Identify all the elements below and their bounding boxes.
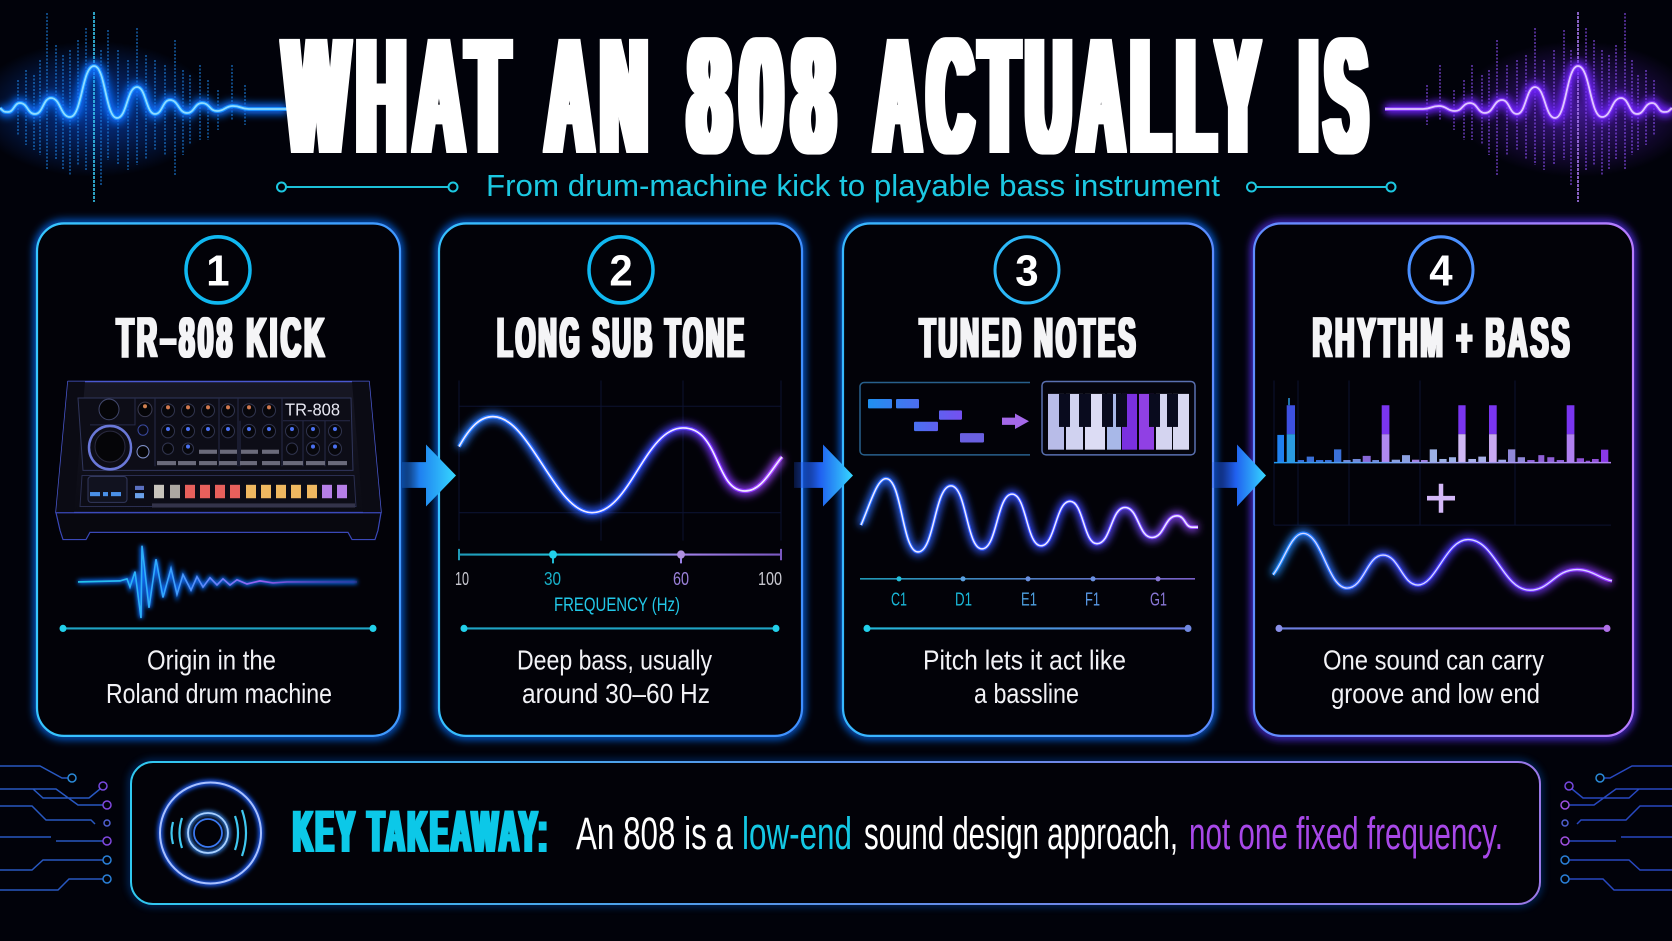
- piano roll: [860, 383, 1030, 455]
- arrow: step 1 to 2: [402, 445, 456, 507]
- panel: TR-808 kick: [37, 223, 400, 736]
- left header waveform: [0, 12, 287, 202]
- frequency axis: 10: [455, 568, 469, 589]
- illustration: TR-808 drum machine: [56, 381, 381, 540]
- left circuit traces: [0, 766, 111, 890]
- description: a bassline: [974, 677, 1079, 709]
- frequency axis: [455, 549, 782, 616]
- takeaway sentence: not one fixed frequency.: [1189, 808, 1503, 859]
- divider: [1276, 625, 1610, 632]
- number badge 4: [1409, 237, 1473, 303]
- title: WHAT: [284, 4, 518, 187]
- takeaway sentence: low-end: [742, 808, 852, 859]
- step cards row: [37, 223, 1633, 736]
- rhythm bar chart: [1274, 380, 1611, 525]
- subtitle: From drum-machine kick to playable bass instrument: [486, 168, 1220, 203]
- infographic canvas: IS: [1300, 4, 1375, 187]
- right circuit traces: [1561, 766, 1672, 890]
- panel: tuned notes: [843, 223, 1213, 736]
- divider: [864, 625, 1192, 632]
- divider: [60, 625, 376, 632]
- number badge 1: 1: [206, 247, 230, 296]
- description: Origin in the: [147, 644, 276, 676]
- arrow: roll to keys: [1002, 414, 1029, 429]
- description: [106, 644, 332, 709]
- heading: TR-808 kick: TR–808 KICK: [117, 305, 328, 369]
- knob rows: [162, 404, 342, 455]
- icon: speaker with sound waves: [160, 782, 261, 884]
- description: Roland drum machine: [106, 677, 332, 709]
- title: [284, 4, 1375, 187]
- sine wave chart: [459, 380, 782, 541]
- panel: tuned notes: TUNED NOTES: [920, 305, 1139, 369]
- number badge 3: [995, 237, 1059, 303]
- panel: key takeaway: [131, 762, 1540, 904]
- kick waveform: [78, 546, 357, 618]
- piano keyboard: [1042, 381, 1195, 455]
- note axis: F1: [1085, 588, 1100, 610]
- takeaway sentence: An 808 is a: [576, 808, 734, 859]
- subtitle: [277, 168, 1396, 203]
- plus sign: [1427, 484, 1455, 513]
- arrow: step 3 to 4: [1212, 445, 1266, 507]
- note axis: D1: [955, 588, 972, 610]
- dial knobs: [89, 399, 152, 469]
- note axis: G1: [1150, 588, 1167, 610]
- description: Deep bass, usually: [517, 644, 712, 676]
- description: One sound can carry: [1323, 644, 1544, 676]
- description: groove and low end: [1331, 677, 1540, 709]
- frequency axis: 100: [758, 568, 782, 589]
- title: AN: [546, 4, 656, 187]
- takeaway sentence: sound design approach,: [864, 808, 1178, 859]
- title: 808: [688, 4, 844, 187]
- bass wave: [1273, 533, 1612, 590]
- step buttons: [154, 485, 347, 498]
- description: Pitch lets it act like: [923, 644, 1126, 676]
- description: [923, 644, 1126, 709]
- panel: long sub tone: [439, 223, 802, 736]
- arrow: step 2 to 3: [794, 445, 853, 507]
- description: [1323, 644, 1544, 709]
- panel: long sub tone: LONG SUB TONE: [497, 305, 747, 369]
- panel: key takeaway: KEY TAKEAWAY:: [293, 800, 550, 864]
- small labels: [157, 450, 347, 465]
- takeaway sentence: [576, 808, 1503, 859]
- note axis: C1: [891, 588, 907, 610]
- model label: TR-808: [285, 399, 340, 420]
- frequency axis: 30: [544, 568, 561, 589]
- number badge 2: [589, 237, 653, 303]
- panel: rhythm + bass: [1254, 223, 1633, 736]
- frequency axis: 60: [673, 568, 689, 589]
- decaying bass wave: [861, 479, 1198, 552]
- right header waveform: [1385, 12, 1672, 202]
- number badge 3: 3: [1015, 247, 1039, 296]
- note axis: E1: [1021, 588, 1037, 610]
- lower control strip: [80, 476, 356, 508]
- number badge 4: 4: [1429, 247, 1453, 296]
- divider: [460, 625, 780, 632]
- number badge 2: 2: [609, 247, 633, 296]
- number badge 1: [186, 237, 250, 303]
- description: around 30–60 Hz: [522, 677, 710, 709]
- frequency axis: FREQUENCY (Hz): [554, 595, 680, 616]
- description: [517, 644, 712, 709]
- note axis: [860, 576, 1195, 610]
